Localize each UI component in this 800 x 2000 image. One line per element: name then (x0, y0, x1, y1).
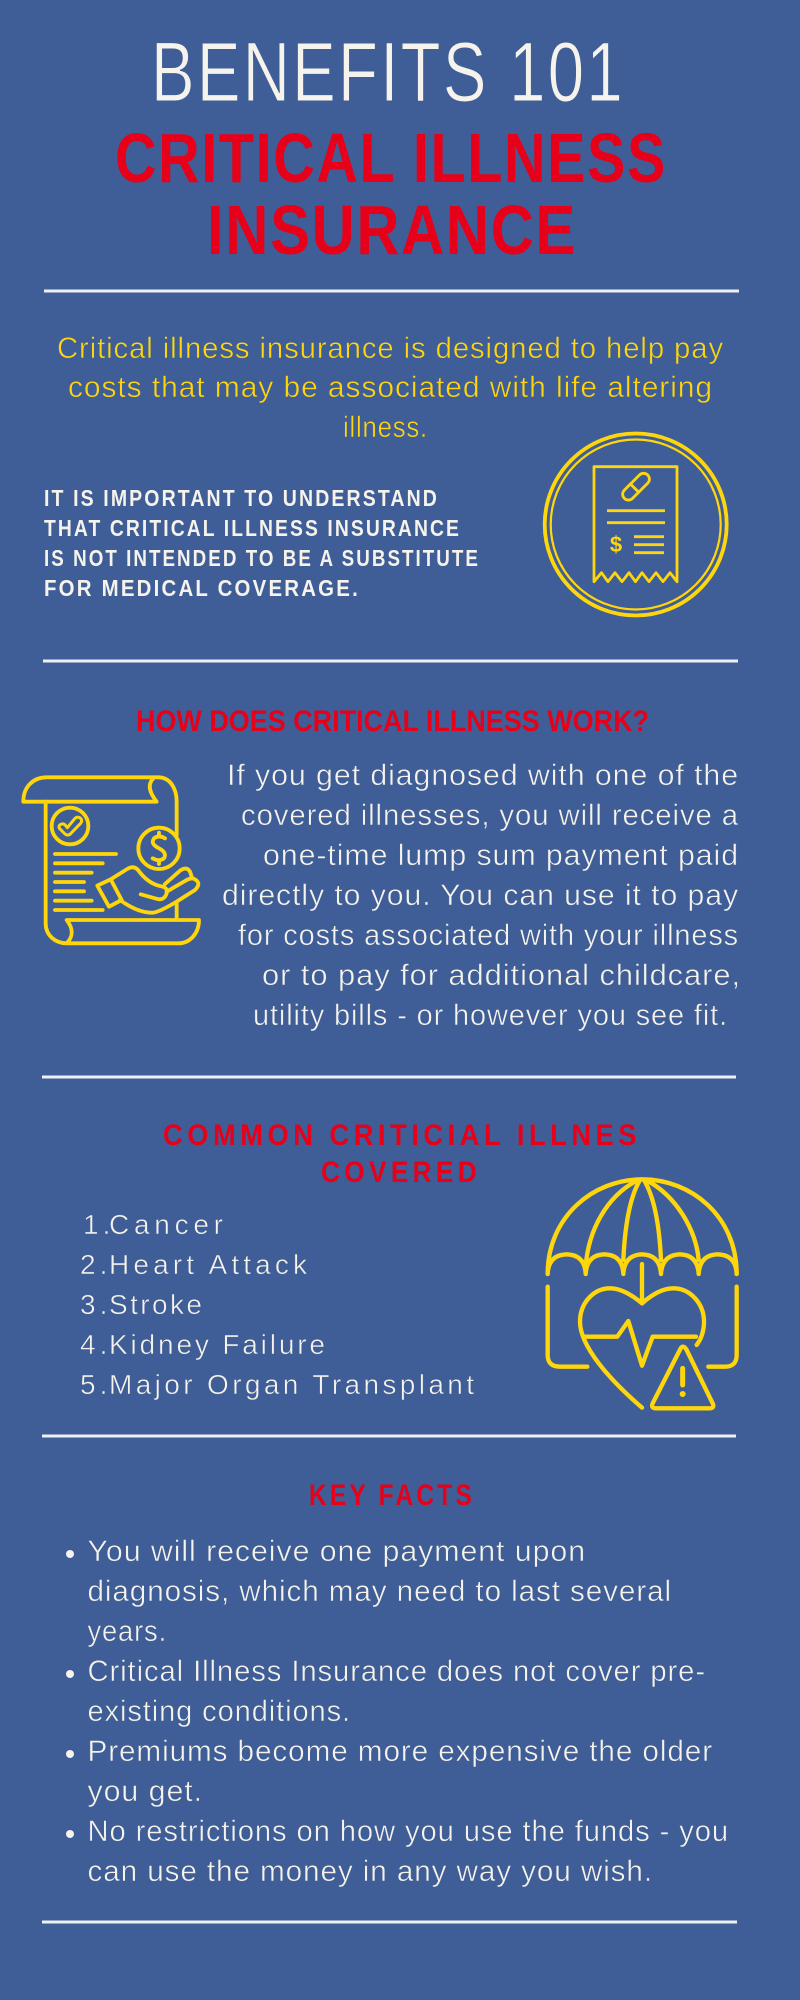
callout: not a substitute for medical coverage (44, 485, 480, 601)
bullet: no restrictions: can use the money in any way you wish. (88, 1855, 653, 1888)
bullet: pre-existing conditions (66, 1655, 706, 1728)
bullet: no restrictions: No restrictions on how you use the funds - you (88, 1815, 729, 1848)
bullet: premiums: Premiums become more expensive the older (88, 1735, 713, 1768)
numbered list of illnesses: 1. (83, 1209, 114, 1240)
numbered list of illnesses: Major Organ Transplant (109, 1369, 474, 1400)
intro text (57, 332, 724, 444)
bullet: one payment (66, 1535, 672, 1648)
text block: how it works: or to pay for additional childcare, (262, 959, 741, 992)
text block: how it works (222, 759, 741, 1032)
numbered list of illnesses: Cancer (109, 1209, 223, 1240)
bullet: no restrictions (66, 1815, 729, 1888)
heading: how does critical illness work: HOW DOES CRITICAL ILLNESS WORK? (136, 705, 649, 738)
callout: not a substitute for medical coverage: IS NOT INTENDED TO BE A SUBSTITUTE (44, 545, 480, 571)
icon: umbrella over heart with warning (548, 1179, 737, 1408)
icon: medical bill receipt (545, 434, 727, 616)
heading: common critical illness covered (163, 1119, 641, 1189)
numbered list of illnesses: Kidney Failure (109, 1329, 325, 1360)
text block: how it works: covered illnesses, you will receive a (241, 799, 739, 832)
intro text: illness. (343, 411, 428, 444)
numbered list of illnesses: 2. (80, 1249, 111, 1280)
icon: medical bill receipt: $ (610, 532, 622, 557)
bullet: pre-existing conditions: existing conditions. (88, 1695, 351, 1728)
numbered list of illnesses: 5. (80, 1369, 111, 1400)
intro text: Critical illness insurance is designed to help pay (57, 332, 724, 365)
title line: benefits 101: BENEFITS 101 (151, 25, 625, 119)
bullet: pre-existing conditions: Critical Illness Insurance does not cover pre- (88, 1655, 706, 1688)
numbered list of illnesses: 4. (80, 1329, 111, 1360)
callout: not a substitute for medical coverage: FOR MEDICAL COVERAGE. (44, 575, 360, 601)
heading: critical illness insurance: INSURANCE (207, 191, 577, 269)
heading: common critical illness covered: COVERED (321, 1156, 481, 1189)
text block: how it works: utility bills - or however you see fit. (253, 999, 728, 1032)
title (115, 25, 667, 269)
numbered list of illnesses (80, 1209, 474, 1400)
bullet: one payment: diagnosis, which may need to last several (88, 1575, 672, 1608)
intro text: costs that may be associated with life altering (68, 371, 713, 404)
text block: how it works: for costs associated with your illness (238, 919, 739, 952)
numbered list of illnesses: Heart Attack (109, 1249, 308, 1280)
text block: how it works: one-time lump sum payment paid (263, 839, 739, 872)
heading: critical illness insurance: CRITICAL ILLNESS (115, 119, 667, 197)
heading: key facts: KEY FACTS (309, 1479, 475, 1512)
bullet: premiums: you get. (88, 1775, 203, 1808)
numbered list of illnesses: Stroke (109, 1289, 202, 1320)
callout: not a substitute for medical coverage: THAT CRITICAL ILLNESS INSURANCE (44, 515, 461, 541)
heading: critical illness insurance (115, 119, 667, 269)
bullet: premiums (66, 1735, 713, 1808)
text block: how it works: directly to you. You can use it to pay (222, 879, 739, 912)
bulleted key facts (66, 1535, 729, 1888)
bullet: one payment: You will receive one payment upon (88, 1535, 586, 1568)
icon: scroll with coin and hand (23, 777, 199, 943)
text block: how it works: If you get diagnosed with one of the (227, 759, 739, 792)
numbered list of illnesses: 3. (80, 1289, 111, 1320)
callout: not a substitute for medical coverage: IT IS IMPORTANT TO UNDERSTAND (44, 485, 439, 511)
heading: common critical illness covered: COMMON CRITICIAL ILLNES (163, 1119, 641, 1152)
bullet: one payment: years. (88, 1615, 167, 1648)
